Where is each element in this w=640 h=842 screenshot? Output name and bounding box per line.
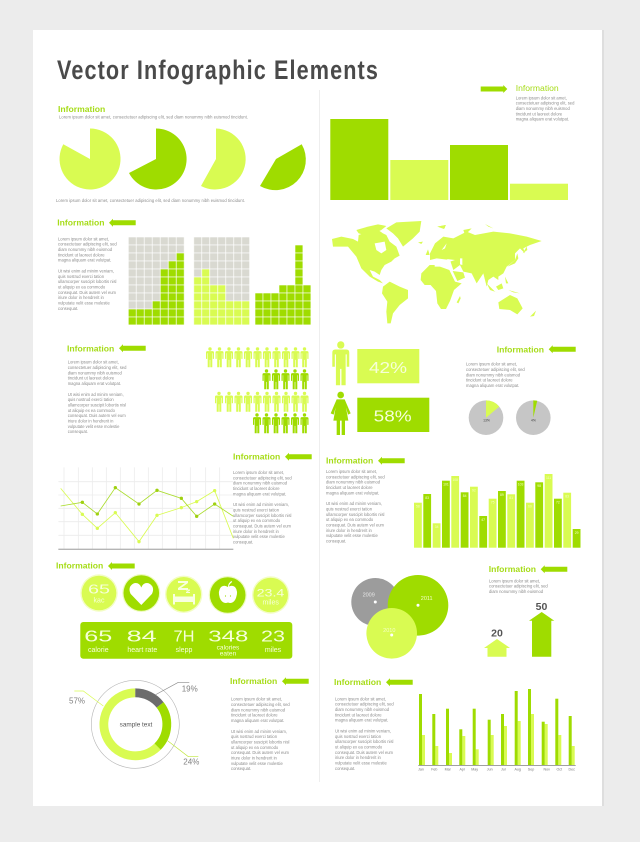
text: grids: ullamcorper suscipit lobortis nisl [58, 279, 117, 284]
arrow: venn [541, 565, 567, 573]
text: people: iriure dolor in hendrerit in [68, 418, 114, 423]
text: grids: consequat. [58, 306, 78, 311]
text: donut: consectetuer adipiscing elit, sed [231, 702, 290, 707]
monthly bar chart: Aug [514, 768, 521, 772]
pie 2 [129, 128, 187, 189]
text: line chart: Lorem ipsum dolor sit amet, [233, 470, 284, 475]
monthly bar chart: Dec [568, 768, 575, 772]
panel: fitness stats [56, 561, 292, 659]
donut segment 57 percent [104, 693, 158, 756]
text: line chart: diam nonummy nibh euismod [233, 481, 288, 486]
stats bar: 7H [174, 629, 194, 646]
text: grids: magna aliquam erat volutpat. [58, 258, 111, 263]
monthly bar chart: Apr [460, 768, 466, 772]
column bars: 60 [528, 504, 532, 508]
text: people: magna aliquam erat volutpat. [68, 381, 121, 386]
badge: 65 kac: kac [94, 597, 105, 604]
text: grids: consectetuer adipiscing elit, sed [58, 242, 117, 247]
world map [332, 221, 542, 323]
monthly bar chart [418, 689, 576, 772]
arrow: 20 up [484, 639, 510, 657]
heading: donut: Information [230, 676, 277, 686]
text: monthly: Ut wisi enim ad minim veniam, [335, 729, 391, 734]
panel: column chart [326, 455, 580, 548]
text: column chart: iriure dolor in hendrerit in [326, 528, 372, 533]
people row 1 [206, 347, 308, 367]
arrow: people [119, 344, 146, 352]
text: donut: vulputate velit esse molestie [231, 761, 283, 766]
value: 58 percent: 58% [374, 409, 412, 426]
text: people: diam nonummy nibh euismod [68, 370, 122, 375]
text: donut: diam nonummy nibh euismod [231, 707, 286, 712]
leader lines [74, 682, 198, 757]
column bars: 101 [443, 482, 449, 486]
people row 4 [253, 413, 308, 433]
text: bars: consectetuer adipiscing elit, sed [516, 101, 575, 106]
icon: bed badge [165, 576, 202, 613]
text: donut: iriure dolor in hendrerit in [231, 755, 277, 760]
people row 3 [215, 392, 308, 412]
text: line chart: tincidunt ut laoreet dolore [233, 486, 280, 491]
bar 2 [390, 160, 448, 200]
heading: column chart: Information [326, 455, 373, 465]
column bars: 34 [435, 525, 439, 529]
column bars: 72 [556, 500, 560, 504]
column bars: 89 [500, 493, 504, 497]
monthly bar chart: Jan [418, 768, 424, 772]
text: donut: tincidunt ut laoreet dolore [231, 713, 278, 718]
stats bar: heart rate [127, 647, 157, 654]
text: people: ut aliquip ex ea commodo [68, 408, 116, 413]
text: grids: Ut wisi enim ad minim veniam, [58, 269, 114, 274]
text: monthly: consequat. Duis autem vel eum [335, 750, 394, 755]
text: line chart: consectetuer adipiscing elit, sed [233, 475, 292, 480]
monthly bar chart: Jul [501, 768, 506, 772]
column bars: 92 [472, 488, 476, 492]
people row 2 [262, 369, 308, 389]
stats bar: miles [265, 647, 282, 654]
text: donut: consequat. Duis autem vel eum [231, 750, 290, 755]
bar 3 [450, 145, 508, 200]
pie 1 [60, 128, 121, 189]
column bars: 83 [425, 496, 429, 500]
small pie 4 percent: 4% [531, 418, 536, 422]
text: bars: tincidunt ut laoreet dolore [516, 111, 563, 116]
arrow: fitness [108, 562, 135, 570]
panel: gender stats [331, 341, 429, 435]
icon: man [332, 341, 349, 385]
text: people: quis nostrud exerci tation [68, 397, 114, 402]
text: grids: Lorem ipsum dolor sit amet, [58, 236, 109, 241]
heading: pies: Information [58, 104, 105, 114]
text: grids: vulputate velit esse molestie [58, 300, 110, 306]
text: pies caption: Lorem ipsum dolor sit amet, consectetuer adipiscing elit, sed diam nonummy nibh euismod tincidunt. [56, 198, 245, 203]
arrow: grids [109, 219, 136, 227]
text: column chart: Ut wisi enim ad minim veniam, [326, 501, 382, 506]
monthly bar chart: Feb [431, 768, 437, 772]
stats bar: 84 [127, 629, 157, 646]
text: people: Lorem ipsum dolor sit amet, [68, 360, 119, 365]
arrow: column chart [378, 457, 405, 465]
text: people: consequat. [68, 429, 88, 434]
icon: woman [331, 392, 351, 435]
column bars: 47 [481, 518, 485, 522]
text: line chart: magna aliquam erat volutpat. [233, 491, 286, 496]
text: people: vulputate velit esse molestie [68, 424, 120, 429]
text: monthly: iriure dolor in hendrerit in [335, 755, 381, 760]
text: column chart: consequat. Duis autem vel eum [326, 522, 385, 527]
bar 1 [330, 119, 388, 200]
text: monthly: consectetuer adipiscing elit, sed [335, 702, 394, 707]
venn diagram: 2011 [421, 596, 433, 602]
stats bar: calorie [88, 647, 109, 654]
text: venn: Lorem ipsum dolor sit amet, [489, 578, 540, 583]
venn diagram [351, 575, 448, 659]
text: donut: quis nostrud exerci tation [231, 734, 278, 739]
center label: sample text [120, 721, 153, 728]
text: grids: tincidunt ut laoreet dolore [58, 252, 105, 257]
pie 3 [201, 128, 246, 189]
badge: 23.4 miles: miles [263, 600, 279, 606]
text: column chart: quis nostrud exerci tation [326, 506, 373, 511]
stats bar: eaten [220, 650, 237, 658]
panel: top bar chart [330, 83, 575, 200]
text: monthly: magna aliquam erat volutpat. [335, 718, 388, 723]
chart grid and lines [58, 467, 233, 549]
heading: line chart: Information [233, 451, 280, 461]
arrow: donut [282, 677, 309, 685]
text: grids: consequat. Duis autem vel eum [58, 290, 117, 295]
text: small pies: Lorem ipsum dolor sit amet, [466, 362, 517, 367]
heading: bars: Information [516, 83, 559, 93]
text: bars: Lorem ipsum dolor sit amet, [516, 95, 567, 100]
panel: small pies [466, 345, 576, 435]
text: grids: iriure dolor in hendrerit in [58, 295, 104, 300]
text: small pies: diam nonummy nibh euismod [466, 372, 521, 377]
text: small pies: tincidunt ut laoreet dolore [466, 378, 513, 383]
text: monthly: Lorem ipsum dolor sit amet, [335, 696, 386, 701]
venn diagram: 2009 [363, 592, 375, 598]
text: donut: ut aliquip ex ea commodo [231, 745, 279, 750]
heading: monthly: Information [334, 677, 381, 687]
text: column chart: tincidunt ut laoreet dolore [326, 485, 373, 490]
panel: line chart [58, 451, 312, 549]
icon: heart badge [122, 574, 160, 612]
arrow: 50 up [529, 612, 554, 657]
arrow: right [481, 85, 507, 93]
pie 4 [260, 144, 306, 190]
text: column chart: diam nonummy nibh euismod [326, 480, 381, 485]
column bars: 83 [565, 494, 569, 498]
grid 2 [194, 237, 250, 325]
box: 42 percent [357, 349, 419, 383]
column bars: 108 [452, 478, 458, 482]
text: donut: magna aliquam erat volutpat. [231, 718, 284, 723]
monthly bar chart: Oct [557, 768, 562, 772]
box: 58 percent [357, 398, 429, 432]
text: venn: diam nonummy nibh euismod [489, 589, 544, 594]
text: column chart: ullamcorper suscipit lobortis nisl [326, 512, 385, 517]
text: monthly: ut aliquip ex ea commodo [335, 745, 383, 750]
heading: people: Information [67, 343, 114, 353]
text: column chart: ut aliquip ex ea commodo [326, 517, 374, 522]
value: 50: 50 [536, 601, 547, 613]
heading: venn: Information [489, 564, 536, 574]
text: bars: magna aliquam erat volutpat. [516, 117, 569, 122]
panel: people chart [67, 343, 308, 434]
label 57 percent: 57% [69, 697, 85, 706]
badge: 23.4 miles [252, 576, 289, 614]
small pie 13 percent: 13% [483, 418, 490, 422]
text: bars: diam nonummy nibh euismod [516, 106, 570, 111]
label 24 percent: 24% [183, 758, 199, 767]
heading: small pies: Information [497, 345, 544, 355]
arrow: small pies [549, 345, 576, 353]
text: line chart: ullamcorper suscipit lobortis nisl [233, 513, 292, 518]
panel: pie charts [56, 104, 306, 203]
monthly bar chart: Jun [487, 768, 493, 772]
text: line chart: vulputate velit esse molestie [233, 534, 285, 539]
text: column chart: magna aliquam erat volutpat. [326, 490, 379, 495]
monthly bar chart: Nov [543, 768, 550, 772]
column bars: 84 [463, 494, 467, 498]
badge: 65 kac [80, 574, 118, 612]
bar 4 [510, 184, 568, 200]
panel: square grids [57, 218, 311, 325]
text: monthly: quis nostrud exerci tation [335, 734, 382, 739]
text: monthly: consequat. [335, 766, 355, 771]
donut segment 24 percent [158, 705, 167, 747]
text: grids: diam nonummy nibh euismod [58, 247, 113, 252]
column bars: 111 [546, 476, 551, 480]
text: monthly: vulputate velit esse molestie [335, 760, 387, 766]
heading: grids: Information [57, 218, 105, 228]
column bars [414, 474, 580, 548]
column bars: 81 [509, 496, 513, 500]
arrow: monthly [386, 678, 413, 686]
panel: donut chart [69, 676, 309, 771]
arrow: line chart [285, 453, 312, 461]
stats bar: slepp [176, 647, 192, 654]
heading: fitness: Information [56, 561, 103, 571]
text: donut: Lorem ipsum dolor sit amet, [231, 697, 282, 702]
panel: monthly bars [334, 677, 576, 772]
column bars: 103 [518, 482, 524, 486]
grid 3 [255, 245, 311, 325]
panel: venn and arrows [351, 564, 567, 659]
title: Vector Infographic Elements [57, 55, 379, 85]
grid 1 [128, 237, 184, 325]
column bars: 58 [416, 504, 420, 508]
text: line chart: Ut wisi enim ad minim veniam, [233, 502, 289, 507]
text: column chart: consequat. [326, 538, 346, 543]
badge: 65 kac: 65 [88, 581, 110, 596]
text: monthly: diam nonummy nibh euismod [335, 707, 390, 712]
column bars: 98 [537, 484, 541, 488]
donut outer ring [91, 680, 179, 768]
donut segment 19 percent [135, 693, 160, 705]
column bars: 29 [575, 531, 579, 535]
text: donut: consequat. [231, 766, 251, 771]
value: 42 percent: 42% [369, 360, 407, 377]
text: people: consequat. Duis autem vel eum [68, 413, 126, 418]
text: people: tincidunt ut laoreet dolore [68, 376, 115, 381]
venn diagram: 2010 [383, 628, 395, 634]
text: line chart: iriure dolor in hendrerit in [233, 529, 279, 534]
text: grids: quis nostrud exerci tation [58, 274, 105, 279]
text: small pies: magna aliquam erat volutpat. [466, 383, 519, 388]
monthly bar chart: Mar [445, 768, 452, 772]
text: small pies: consectetuer adipiscing elit, sed [466, 367, 525, 372]
text: column chart: vulputate velit esse molestie [326, 533, 378, 538]
text: line chart: ut aliquip ex ea commodo [233, 518, 281, 523]
stats bar [80, 622, 292, 659]
column bars: 75 [491, 500, 495, 504]
monthly bar chart: May [471, 768, 478, 772]
text: people: consectetuer adipiscing elit, sed [68, 365, 127, 370]
text: column chart: consectetuer adipiscing elit, sed [326, 474, 385, 479]
text: line chart: consequat. [233, 539, 253, 544]
text: pies intro: Lorem ipsum dolor sit amet, consectetuer adipiscing elit, sed diam nonummy nibh euismod tincidunt. [59, 115, 248, 120]
badge: 23.4 miles: 23.4 [257, 588, 284, 600]
text: venn: consectetuer adipiscing elit, sed [489, 584, 548, 589]
stats bar: calories [217, 644, 240, 651]
text: monthly: ullamcorper suscipit lobortis nisl [335, 739, 394, 744]
text: grids: ut aliquip ex ea commodo [58, 285, 106, 290]
label 19 percent: 19% [182, 684, 198, 693]
text: people: ullamcorper suscipit lobortis nisl [68, 402, 126, 407]
stats bar: 65 [84, 629, 112, 646]
text: line chart: consequat. Duis autem vel eum [233, 523, 292, 528]
text: monthly: tincidunt ut laoreet dolore [335, 712, 382, 717]
text: people: Ut wisi enim ad minim veniam, [68, 392, 124, 397]
value: 20: 20 [491, 628, 503, 640]
icon: apple badge [209, 576, 247, 614]
monthly bar chart: Sep [528, 768, 534, 772]
text: line chart: quis nostrud exerci tation [233, 507, 280, 512]
stats bar: 23 [261, 629, 285, 646]
text: donut: ullamcorper suscipit lobortis nisl [231, 739, 290, 744]
text: donut: Ut wisi enim ad minim veniam, [231, 729, 287, 734]
text: column chart: Lorem ipsum dolor sit amet, [326, 469, 377, 474]
stats bar: 348 [208, 629, 248, 646]
